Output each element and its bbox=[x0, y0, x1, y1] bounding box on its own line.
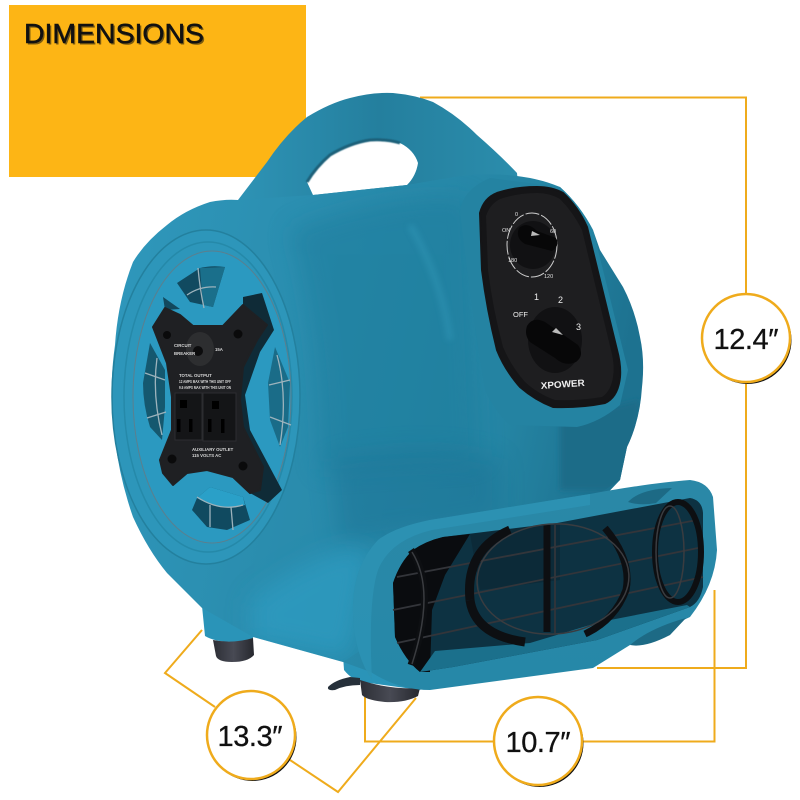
nozzle opening bbox=[393, 498, 703, 672]
heading text: DIMENSIONS bbox=[24, 18, 204, 49]
outlet plate bbox=[153, 293, 282, 503]
speed dial bbox=[513, 292, 582, 373]
carry handle bbox=[238, 93, 520, 215]
plate labels: BREAKER bbox=[174, 351, 196, 356]
mounting holes bbox=[163, 330, 248, 470]
handle shading bbox=[307, 140, 400, 182]
rear and front feet bbox=[202, 606, 430, 702]
plate labels: CIRCUIT bbox=[174, 343, 192, 348]
nozzle grille bbox=[393, 520, 703, 643]
dimension callout: length: 13.3″ bbox=[218, 721, 282, 753]
plate labels: 15A bbox=[215, 347, 223, 352]
blower product illustration bbox=[112, 93, 717, 702]
brand logo: XPOWER bbox=[540, 378, 585, 392]
timer dial: 180 bbox=[508, 258, 517, 264]
dimension lines bbox=[165, 98, 746, 792]
plate shadow bbox=[240, 293, 282, 503]
dimension callout: height: 12.4″ bbox=[714, 324, 778, 356]
dimension callout: width: 10.7″ bbox=[506, 727, 570, 759]
plate labels: AUXILIARY OUTLET bbox=[192, 447, 234, 452]
housing shading bbox=[250, 198, 640, 660]
timer dial: ON bbox=[502, 228, 510, 234]
timer dial: 0 bbox=[515, 212, 518, 218]
circuit breaker bbox=[186, 332, 214, 366]
dimension callout: width bbox=[494, 697, 584, 787]
nozzle floor bbox=[420, 605, 690, 672]
plate labels bbox=[174, 343, 234, 458]
power outlets bbox=[175, 393, 236, 441]
air nozzle bbox=[353, 480, 717, 690]
heading banner bbox=[9, 5, 306, 177]
timer dial bbox=[502, 212, 557, 280]
timer dial: 60 bbox=[550, 229, 556, 235]
black left interior bbox=[393, 534, 470, 672]
main housing bbox=[112, 174, 643, 690]
dimension callout: height bbox=[702, 294, 792, 384]
speed dial: 1 bbox=[534, 292, 539, 302]
speed dial: 2 bbox=[558, 295, 563, 305]
side wheel ring bbox=[112, 230, 300, 564]
plate labels: 9.5 AMPS MAX WITH THIS UNIT ON bbox=[179, 385, 231, 390]
heading text shadow: DIMENSIONS bbox=[26, 20, 206, 50]
plate labels: TOTAL OUTPUT bbox=[179, 373, 212, 378]
dimension callout: length bbox=[207, 691, 296, 781]
speed dial: OFF bbox=[513, 310, 528, 319]
timer dial: 120 bbox=[544, 274, 553, 280]
side vent openings bbox=[143, 266, 291, 530]
plate labels: 115 VOLTS AC bbox=[192, 453, 221, 458]
control panel bbox=[460, 178, 628, 427]
speed dial: 3 bbox=[576, 322, 581, 332]
plate labels: 12 AMPS MAX WITH THIS UNIT OFF bbox=[179, 379, 231, 384]
